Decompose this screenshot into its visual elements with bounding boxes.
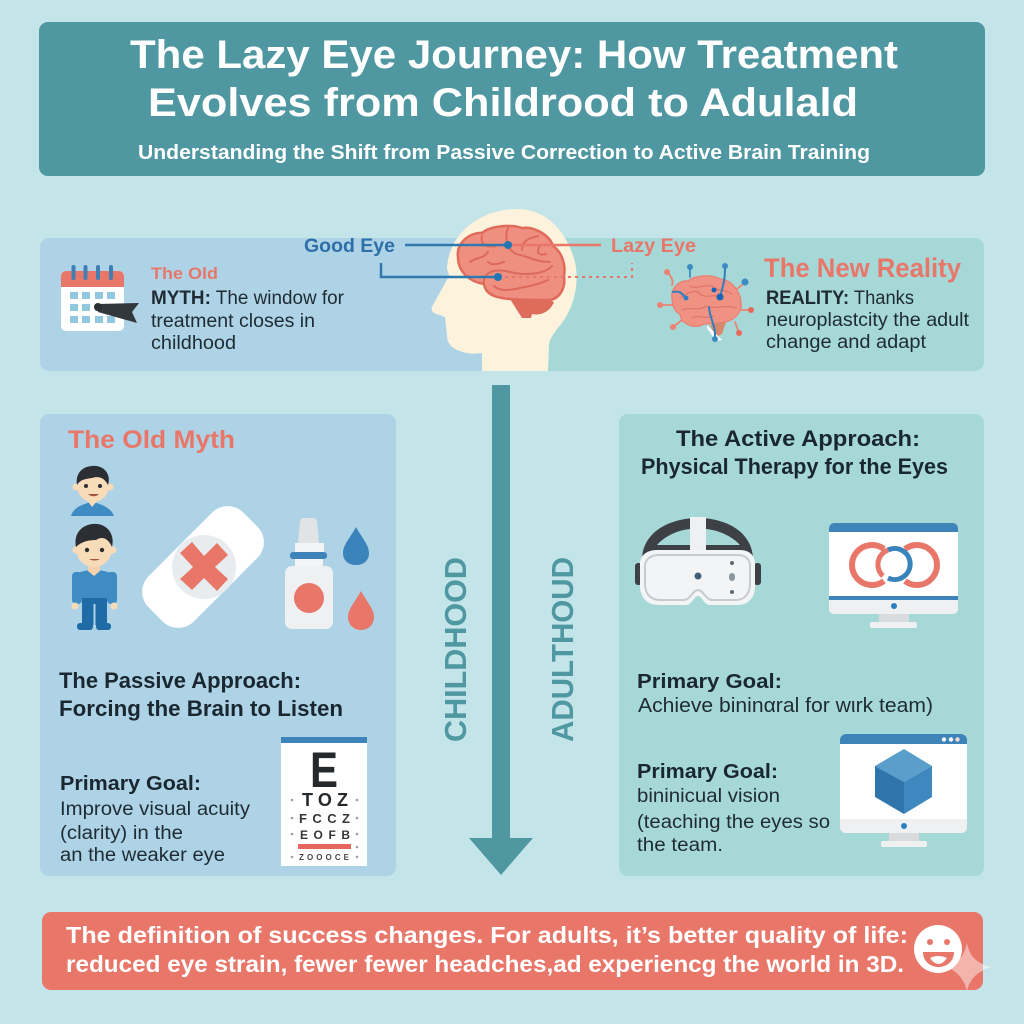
arrow: childhood to adulthood [469,385,533,875]
panel: active approach [619,414,984,876]
text: primary goal childhood [60,773,251,866]
text: primary goal two [637,761,830,856]
icon: calendar [61,265,139,331]
callout text: The definition of success changes. For adults, it’s better quality of life: [66,922,908,948]
icon: blue drop [343,527,369,565]
text: the old myth [151,264,345,354]
text: primary goal childhood: an the weaker eye [60,845,225,866]
icon: eye drop bottle [285,518,333,629]
label: good eye: Good Eye [304,236,395,257]
icon: child standing [72,524,118,630]
icon: sparkle [947,943,992,991]
callout text: reduced eye strain, fewer fewer headches,ad experiencg the world in 3D. [66,951,904,977]
icon: child portrait [71,466,114,516]
text: the old myth: treatment closes in [151,311,315,332]
icon: coral drop [348,591,374,630]
callout text [66,922,908,977]
text: primary goal two: bininicual vision [637,786,780,807]
connector: dotted pathway [498,263,632,277]
heading: the old myth: The Old Myth [68,426,235,454]
label: lazy eye: Lazy Eye [611,236,696,257]
text: primary goal two: the team. [637,835,723,856]
heading: passive approach [59,668,343,721]
text: the new reality [764,253,970,353]
connector: lazy eye line [510,244,601,246]
connector: blue pathway [381,263,502,281]
text: primary goal childhood: Improve visual acuity [60,799,251,820]
icon: eye chart: E [310,742,338,798]
icon: monitor with cube [840,734,967,847]
icon: eye chart: FCCZ [299,811,350,826]
panel: myth vs reality band [40,209,984,371]
heading: passive approach: Forcing the Brain to Listen [59,696,343,721]
icon: neuroplastic brain [657,263,754,342]
text: primary goal childhood: Primary Goal: [60,773,201,795]
illustration: head with brain [381,209,632,371]
heading: active approach: The Active Approach: [676,426,920,451]
text: the new reality: neuroplastcity the adult [766,310,970,331]
text: the old myth: MYTH: The window for [151,288,345,309]
icon: eye chart [281,737,367,866]
label: childhood: CHILDHOOD [438,557,473,742]
subtitle: Understanding the Shift from Passive Correction to Active Brain Training [138,142,870,164]
callout: success definition [42,912,992,991]
text: the new reality: The New Reality [764,253,961,283]
icon: eye chart: TOZ [302,790,348,810]
title: The Lazy Eye Journey: How Treatment [130,33,898,77]
text: primary goal one [637,671,933,717]
icon: smiley [914,925,962,973]
panel: passive approach [40,414,396,876]
label: adulthood: ADULTHOUD [545,557,580,742]
heading: passive approach: The Passive Approach: [59,668,301,693]
text: the old myth: The Old [151,264,218,283]
text: primary goal two: Primary Goal: [637,761,778,783]
text: the new reality: change and adapt [766,332,927,353]
icon: eye chart: ZOOOCE [299,853,350,862]
text: the old myth: childhood [151,333,236,354]
title banner [39,22,985,176]
icon: eye patch bandage [133,497,273,637]
text: primary goal one: Primary Goal: [637,671,782,693]
text: primary goal two: (teaching the eyes so [637,812,830,833]
icon: brain [458,226,565,318]
heading: active approach: Physical Therapy for the Eyes [641,454,948,479]
connector: good eye line [405,241,512,249]
icon: VR headset [635,517,761,605]
text: the new reality: REALITY: Thanks [766,288,914,309]
icon: eye chart: EOFB [300,828,350,842]
icon: monitor with rings [829,523,958,628]
text: primary goal one: Achieve bininαral for wιrk team) [638,695,933,717]
title: Evolves from Childrood to Adulald [148,81,858,125]
text: primary goal childhood: (clarity) in the [60,823,183,844]
title [130,33,898,125]
heading: active approach [641,426,948,479]
